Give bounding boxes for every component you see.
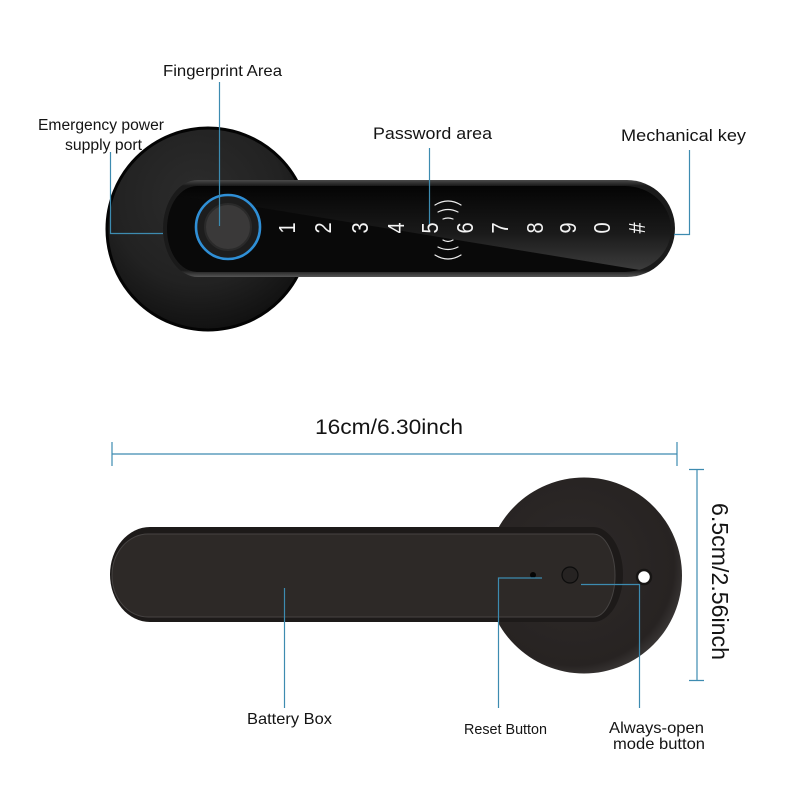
keypad digits: 8 — [522, 222, 548, 234]
label: battery box: Battery Box — [247, 711, 332, 728]
label: always-open mode button — [609, 720, 705, 753]
leader line: always-open button — [581, 584, 640, 708]
back handle face — [112, 534, 615, 617]
lock front view — [107, 128, 680, 330]
keypad digits: 0 — [589, 222, 615, 234]
label: emergency power supply port: Emergency power — [38, 117, 164, 134]
mounting hole — [637, 570, 651, 584]
keypad digits: 4 — [383, 222, 409, 234]
keypad digits: 7 — [487, 222, 513, 234]
keypad digits — [274, 222, 650, 234]
dimension line: width — [112, 442, 677, 466]
back handle body — [110, 527, 623, 622]
label: emergency power supply port — [38, 117, 164, 154]
front handle body — [163, 180, 675, 277]
front rosette plate — [107, 128, 309, 330]
keypad digits: 5 — [417, 222, 443, 234]
label: height dimension: 6.5cm/2.56inch — [707, 503, 733, 660]
front handle glossy face — [167, 186, 668, 272]
label: emergency power supply port: supply port — [65, 137, 143, 154]
icon: NFC waves — [435, 201, 461, 259]
label: reset button: Reset Button — [464, 722, 547, 738]
leader line: emergency power — [110, 152, 163, 234]
leader line: password — [428, 148, 430, 224]
keypad digits: 1 — [274, 222, 300, 234]
label: always-open mode button: Always-open — [609, 720, 704, 737]
label: always-open mode button: mode button — [613, 736, 705, 753]
dimension line: height — [689, 470, 704, 680]
label: mechanical key: Mechanical key — [621, 126, 747, 145]
keypad digits: # — [624, 222, 650, 234]
reset hole — [530, 572, 536, 578]
label: width dimension: 16cm/6.30inch — [315, 416, 463, 439]
keypad digits: 2 — [310, 222, 336, 234]
label: fingerprint area: Fingerprint Area — [163, 63, 282, 80]
keypad digits: 6 — [452, 222, 478, 234]
leader line: fingerprint — [218, 82, 220, 226]
keypad digits: 9 — [555, 222, 581, 234]
leader line: reset button — [498, 578, 542, 708]
lock back view — [110, 478, 682, 674]
always-open button — [562, 567, 578, 583]
back rosette plate — [486, 478, 682, 674]
leader line: battery box — [284, 588, 286, 708]
label: password area: Password area — [373, 124, 493, 143]
fingerprint sensor — [196, 195, 260, 259]
leader line: mechanical key — [674, 150, 690, 234]
keypad digits: 3 — [347, 222, 373, 234]
